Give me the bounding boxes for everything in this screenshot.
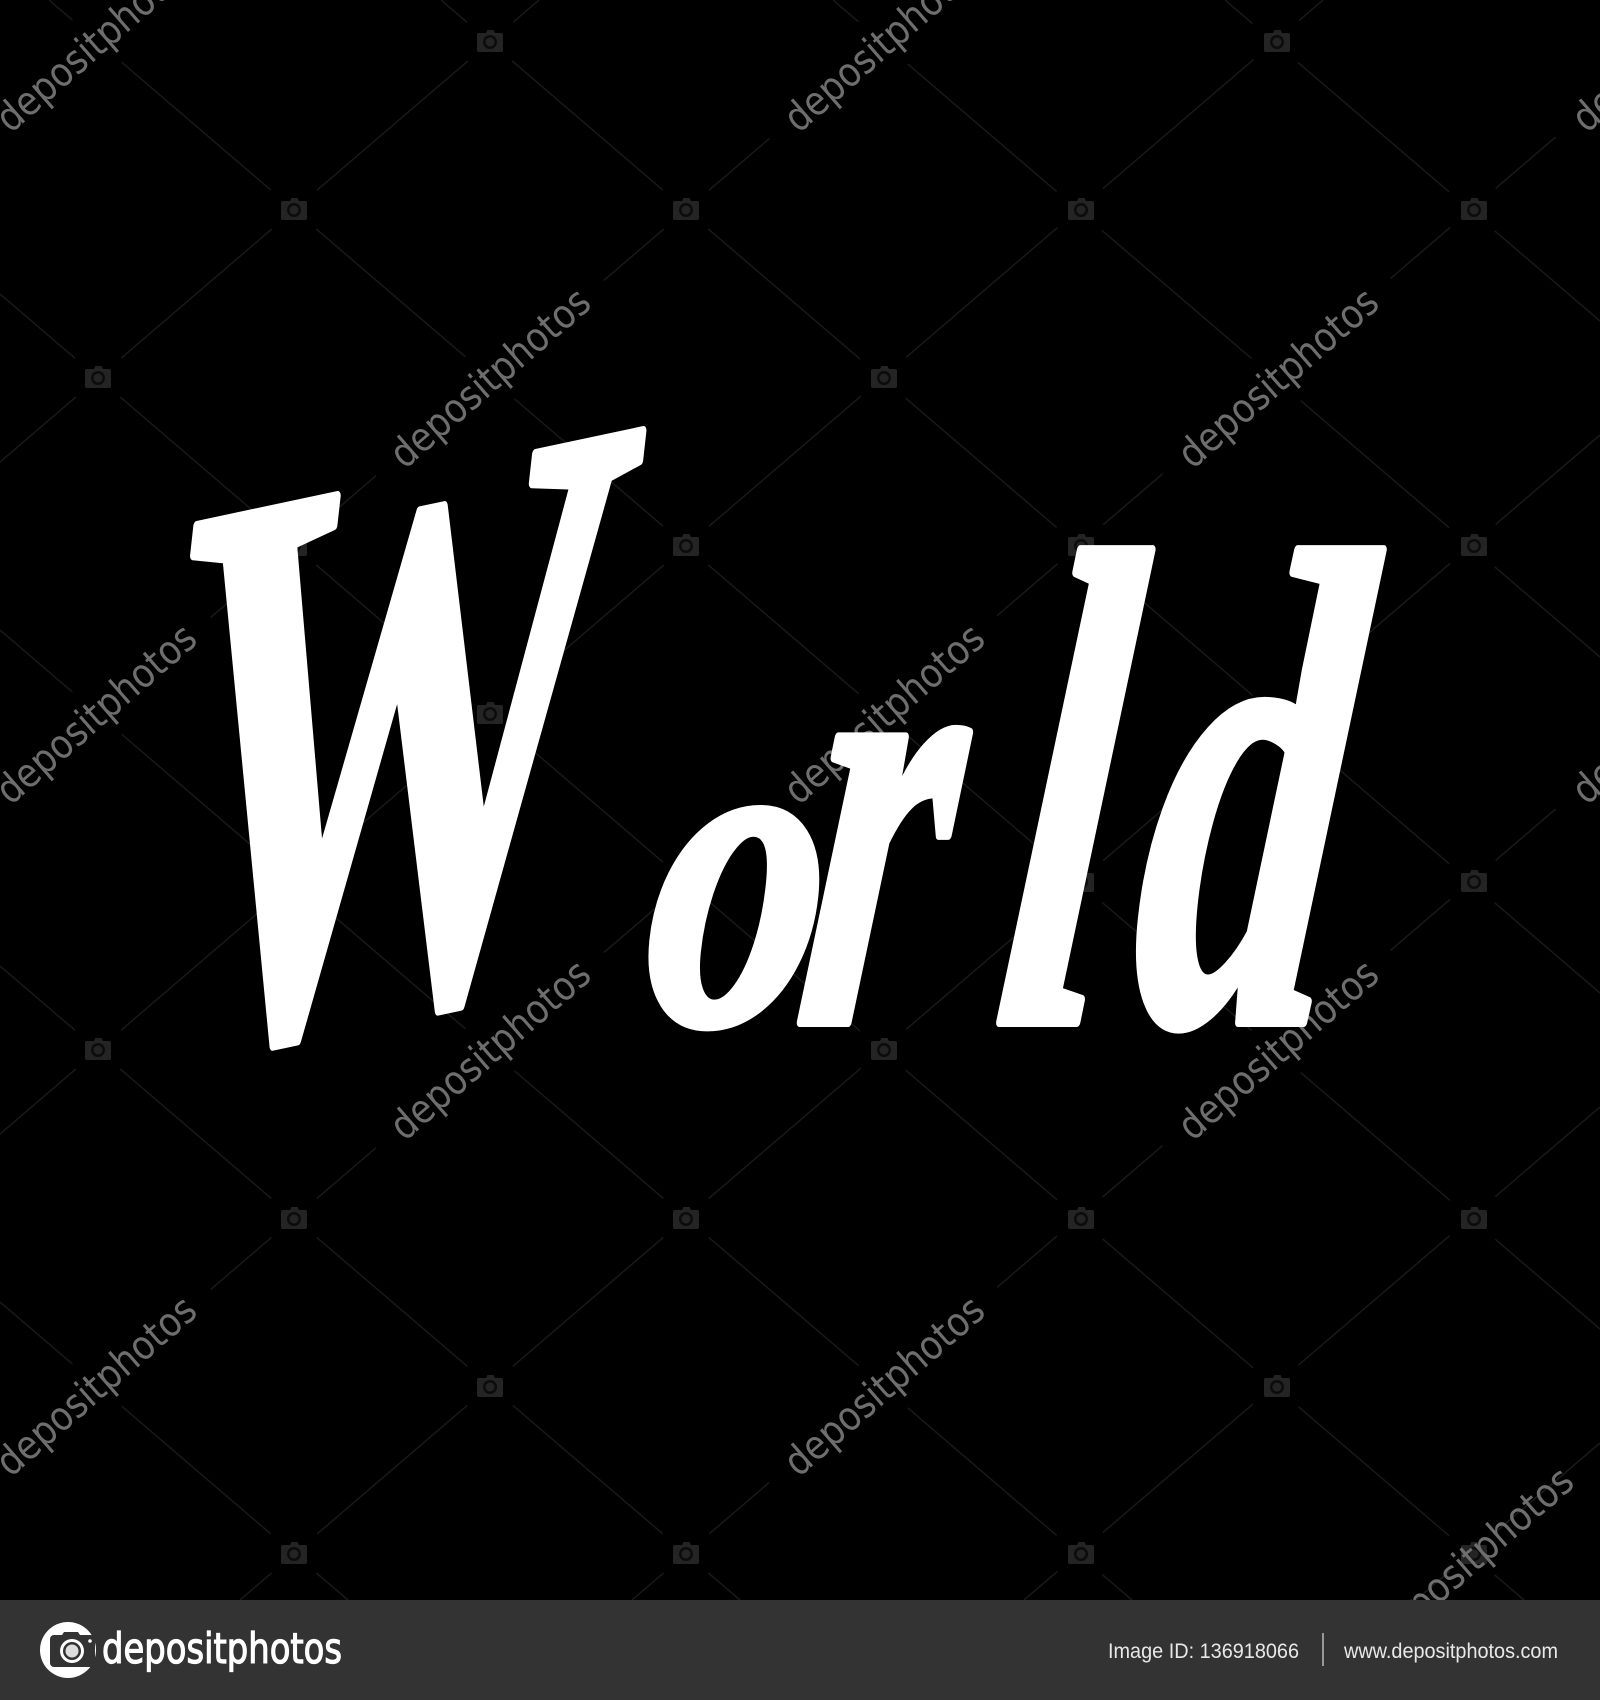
watermark texts: depositphotos bbox=[381, 279, 600, 478]
lettering: World: o bbox=[629, 621, 855, 1120]
watermark camera icons bbox=[85, 30, 1487, 1564]
footer logo icon: camera in circle bbox=[40, 1622, 96, 1678]
lettering: World: W bbox=[158, 243, 646, 1232]
footer logo wordmark: depositphotos bbox=[102, 1624, 342, 1673]
watermark texts: depositphotos bbox=[1169, 951, 1388, 1150]
image id: Image ID: 136918066 bbox=[1108, 1640, 1299, 1663]
watermark texts: depositphotos bbox=[775, 1287, 994, 1486]
watermark texts: depositphotos bbox=[775, 615, 994, 814]
watermark texts: depositphotos bbox=[1169, 279, 1388, 478]
lettering: World: d bbox=[1110, 416, 1399, 1169]
watermark texts: depositphotos bbox=[381, 951, 600, 1150]
website url: www.depositphotos.com bbox=[1343, 1640, 1558, 1663]
footer bar bbox=[0, 1600, 1600, 1700]
lettering: World: l bbox=[975, 416, 1169, 1169]
lettering: World: r bbox=[778, 471, 1001, 1157]
lettering: World bbox=[158, 243, 1399, 1232]
